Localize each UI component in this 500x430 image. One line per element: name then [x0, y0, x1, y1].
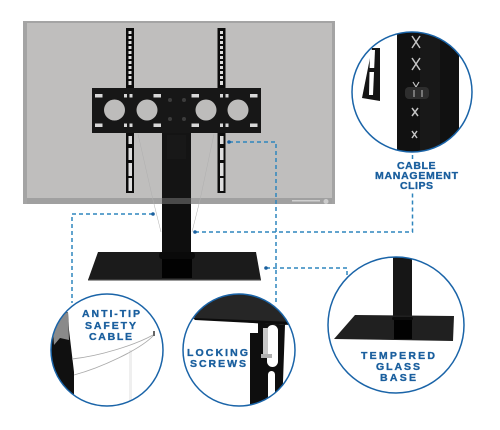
- label: anti-tip safety cable: SAFETY: [85, 320, 136, 332]
- label: locking screws: LOCKING: [187, 347, 248, 359]
- label: anti-tip safety cable: CABLE: [89, 331, 132, 343]
- label: locking screws: SCREWS: [190, 358, 246, 370]
- label: tempered glass base: GLASS: [376, 361, 420, 373]
- leader line: cable management clips: [193, 155, 412, 234]
- label: cable management clips: CLIPS: [400, 180, 433, 192]
- television: [23, 21, 335, 204]
- stand: vertical rails: [126, 28, 226, 193]
- label: anti-tip safety cable: ANTI-TIP: [82, 308, 140, 320]
- stand: safety wires: [138, 134, 214, 232]
- callout: cable management clips: [352, 30, 472, 192]
- callout: locking screws: [180, 290, 300, 410]
- label: cable management clips: CABLE: [397, 160, 436, 172]
- leader line: tempered glass base: [264, 266, 347, 276]
- label: tempered glass base: [361, 350, 435, 384]
- callout: anti-tip safety cable: [50, 294, 163, 410]
- label: anti-tip safety cable: [82, 308, 140, 343]
- callout: tempered glass base: [328, 255, 464, 393]
- label: locking screws: [187, 347, 248, 370]
- leader line: anti-tip safety cable: [72, 212, 155, 303]
- stand: glass base: [88, 252, 261, 280]
- stand: lower pole: [162, 133, 191, 254]
- leader line: locking screws: [227, 140, 276, 304]
- label: cable management clips: [375, 160, 459, 192]
- label: tempered glass base: TEMPERED: [361, 350, 435, 362]
- label: tempered glass base: BASE: [380, 372, 416, 384]
- stand: mounting bracket: [92, 88, 261, 133]
- label: cable management clips: MANAGEMENT: [375, 170, 459, 182]
